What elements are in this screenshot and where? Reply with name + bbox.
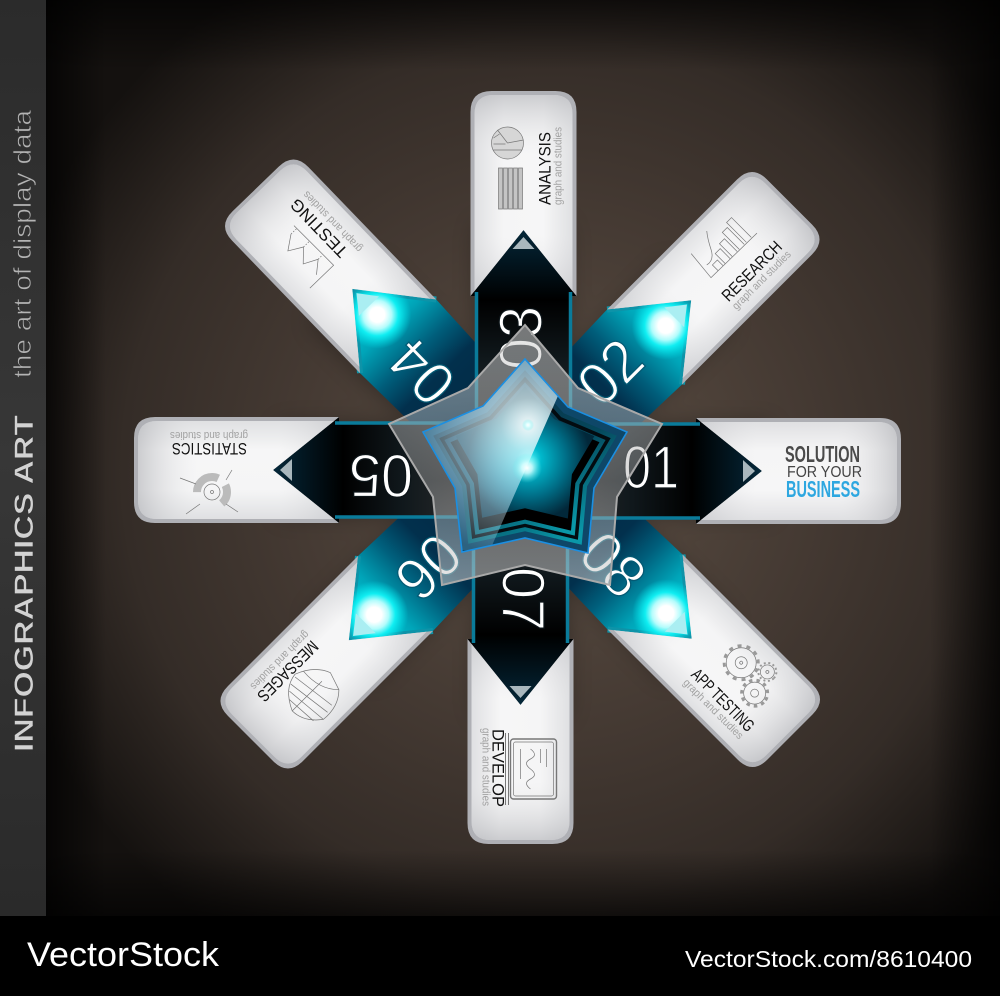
number 08: 08 <box>567 518 659 611</box>
card 02 <box>607 165 827 384</box>
arrow 05 <box>273 417 473 523</box>
arrow 03 <box>470 230 576 430</box>
label: statistics: STATISTICS <box>172 439 247 458</box>
arm 04: testing <box>218 152 529 470</box>
card 06 <box>213 556 433 776</box>
icon: dial chart <box>180 470 238 514</box>
label: app testing: APP TESTING <box>687 665 758 736</box>
glow 02 <box>618 278 714 374</box>
teal edges 03 <box>476 292 570 430</box>
label: for your: FOR YOUR <box>787 464 862 481</box>
card 07 <box>468 639 574 844</box>
icon: gears <box>712 636 787 712</box>
glow 06 <box>326 567 422 663</box>
arm 02: research <box>512 165 827 479</box>
sub: app testing: graph and studies <box>680 677 746 742</box>
sub: research: graph and studies <box>730 248 794 312</box>
icon: pie and bars <box>492 127 524 209</box>
arrow 04 <box>314 252 529 470</box>
glass star <box>389 325 662 585</box>
label: testing: TESTING <box>287 195 352 261</box>
label: solution: SOLUTION <box>785 441 860 467</box>
arrow rim 06 <box>311 556 433 678</box>
centre glow <box>512 453 542 483</box>
side tagline: the art of display data <box>9 110 37 378</box>
number 01: 01 <box>623 434 679 501</box>
arrow rim 04 <box>314 252 436 373</box>
arrow 06 <box>311 461 528 678</box>
label: develop: DEVELOP <box>488 729 508 807</box>
arm 03: analysis <box>470 91 576 430</box>
sub: statistics: graph and studies <box>170 429 248 441</box>
upper sparkle <box>522 419 534 431</box>
card 05 <box>134 417 339 523</box>
card 01 <box>696 418 901 524</box>
footer url: VectorStock.com/8610400 <box>685 946 972 972</box>
tip marker 03 <box>512 237 534 249</box>
tip marker 01 <box>743 460 755 482</box>
tip marker 05 <box>280 459 292 481</box>
arrow 02 <box>512 263 729 479</box>
label: messages: MESSAGES <box>253 637 322 705</box>
teal edges 05 <box>335 423 473 517</box>
icon: screen sketch <box>506 733 556 805</box>
label: analysis: ANALYSIS <box>536 132 554 205</box>
card 04 <box>218 152 436 373</box>
sub: messages: graph and studies <box>247 628 311 692</box>
central star <box>389 325 662 585</box>
arm 08: app testing <box>513 460 827 774</box>
arrow 08 <box>513 460 729 676</box>
card 03 <box>470 91 576 296</box>
tip marker 02 <box>664 295 697 327</box>
inner star layers <box>424 360 626 552</box>
arm 07: develop <box>468 505 574 844</box>
icon: shield chart <box>275 656 350 731</box>
side strip <box>0 0 46 916</box>
number 05: 05 <box>349 442 413 509</box>
number 04: 04 <box>376 325 468 418</box>
arrow rim 08 <box>608 555 729 676</box>
number 06: 06 <box>382 521 475 613</box>
tip marker 04 <box>346 283 379 316</box>
star highlight wedge <box>424 360 558 550</box>
icon: line chart <box>271 225 334 288</box>
arm 06: messages <box>213 461 528 776</box>
arrow 07 <box>468 505 574 705</box>
sub: develop: graph and studies <box>480 728 492 806</box>
number 02: 02 <box>564 326 657 418</box>
footer bar <box>0 916 1000 996</box>
arrow 01 <box>562 418 762 524</box>
inner star outline <box>423 359 627 553</box>
side title: INFOGRAPHICS ART <box>9 414 39 752</box>
tip marker 07 <box>510 686 532 698</box>
tip marker 08 <box>665 612 697 644</box>
card 08 <box>608 555 827 774</box>
icon: growth chart <box>686 207 757 278</box>
number 07: 07 <box>490 567 556 631</box>
sub: testing: graph and studies <box>301 188 365 254</box>
glow 08 <box>618 565 714 661</box>
footer brand: VectorStock <box>27 936 220 974</box>
arm 05: statistics <box>134 417 473 523</box>
sub: analysis: graph and studies <box>552 127 564 205</box>
arm shadows <box>280 225 770 715</box>
tip marker 06 <box>343 613 376 646</box>
arm 01: solution <box>562 418 901 524</box>
number 03: 03 <box>488 306 554 370</box>
teal edges 07 <box>474 505 568 643</box>
arrow rim 02 <box>607 263 729 384</box>
teal edges 01 <box>562 424 700 518</box>
label: business: BUSINESS <box>786 476 860 502</box>
label: research: RESEARCH <box>718 237 786 305</box>
glow 04 <box>329 267 425 363</box>
